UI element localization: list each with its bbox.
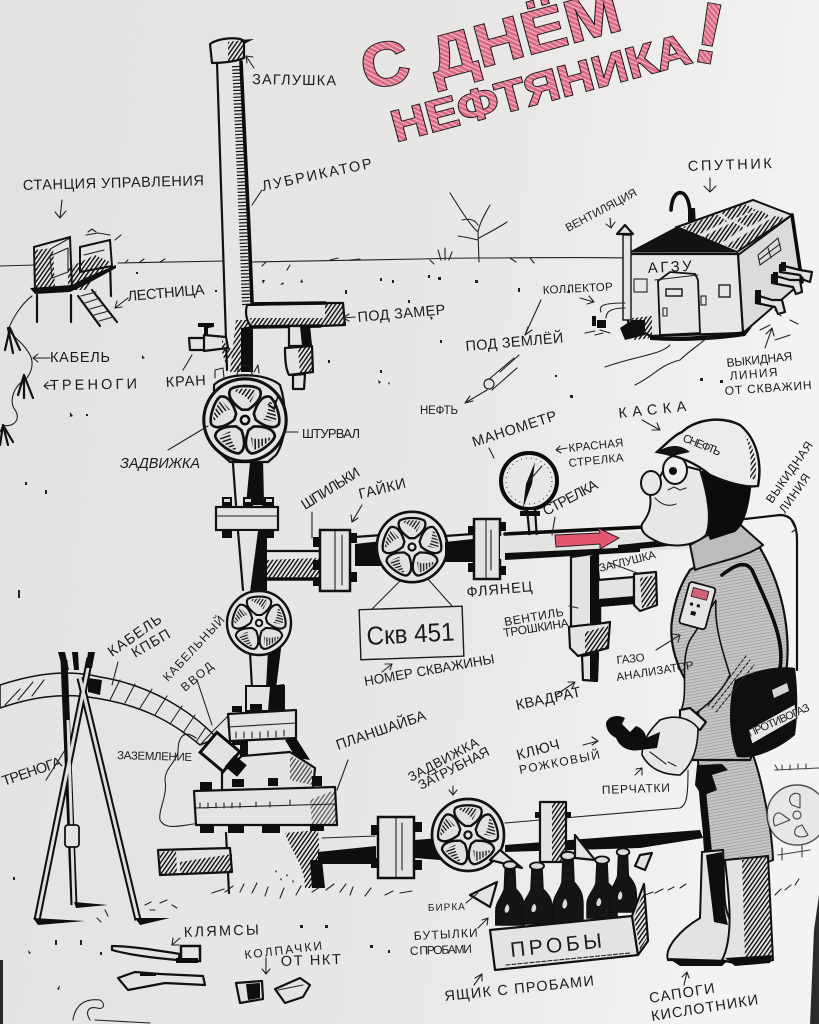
left boot [722, 856, 773, 964]
title: С: С [355, 26, 416, 104]
label: треноги: ТРЕНОГИ [50, 376, 137, 394]
lower flange and annulus line [371, 817, 440, 878]
legs [698, 755, 773, 866]
well number plate [359, 578, 464, 660]
crate label: ПРОБЫ [509, 929, 603, 962]
lower flange [228, 710, 296, 741]
neck [240, 738, 310, 760]
AGZU building [595, 200, 812, 385]
right boot [667, 850, 733, 962]
roof gable [630, 227, 737, 252]
icon: tap [189, 323, 234, 365]
lower stem [246, 462, 262, 505]
door [658, 272, 700, 335]
grounding wire [160, 734, 196, 826]
left side outlet [158, 848, 232, 875]
label: спутник: СПУТНИК [688, 156, 773, 175]
icon: top plug [210, 38, 244, 63]
label: бутылки с пробами: БУТЫЛКИ [413, 926, 478, 943]
label: колпачки от нкт [244, 939, 341, 970]
cable [0, 673, 217, 745]
label: кабельный ввод: ВВОД [178, 659, 216, 694]
T-junction: metering branch [246, 303, 345, 389]
well column below plate [158, 830, 376, 893]
ladder [78, 290, 117, 326]
base shading [650, 327, 752, 341]
nose [641, 471, 661, 495]
label: под замер: ПОД ЗАМЕР [357, 302, 446, 326]
label: противогаз: ПРОТИВОГАЗ [746, 702, 812, 740]
label: колпачки от нкт: ОТ НКТ [281, 952, 341, 970]
wrench [606, 716, 660, 750]
arm [682, 600, 730, 718]
label: нефть: НЕФТЬ [420, 405, 458, 417]
hard hat [657, 420, 759, 486]
cable entry [200, 716, 251, 781]
label: номер скважины: НОМЕР СКВАЖИНЫ [363, 651, 496, 689]
well number plate: Скв 451 [366, 616, 455, 651]
side wall [738, 215, 802, 333]
label: кран: КРАН [165, 373, 206, 391]
label: вентиляция: ВЕНТИЛЯЦИЯ [564, 187, 639, 235]
pipe hatching ticks [236, 66, 246, 305]
cabinet [34, 237, 72, 290]
label: бутылки с пробами: С ПРОБАМИ [410, 942, 472, 958]
wheel [204, 379, 286, 461]
plug below the branch [289, 326, 311, 346]
label: выкидная линия от скважин: ЛИНИЯ [729, 365, 778, 383]
label: квадрат: КВАДРАТ [515, 685, 583, 714]
feet [33, 902, 170, 925]
legs [37, 262, 111, 322]
label: под землёй: ПОД ЗЕМЛЁЙ [465, 329, 564, 355]
label: манометр: МАНОМЕТР [470, 408, 559, 451]
cuff [680, 708, 706, 730]
label: заземление: ЗАЗЕМЛЕНИЕ [117, 750, 193, 764]
valve housing [211, 375, 285, 462]
label: задвижка: ЗАДВИЖКА [120, 456, 200, 472]
label: вентиль трошкина: ТРОШКИНА [502, 616, 570, 640]
label: выкидная линия от скважин: ВЫКИДНАЯ [726, 349, 793, 370]
lower master valve wheel [227, 591, 291, 688]
label: сапоги кислотники: САПОГИ [648, 981, 716, 1007]
grass at well base [97, 870, 799, 922]
label: заглушка: ЗАГЛУШКА [252, 72, 337, 89]
right side outlet [322, 836, 375, 838]
bottom hook sketch [73, 1000, 150, 1023]
page edge shadow [0, 895, 819, 1024]
label: лубрикатор: ЛУБРИКАТОР [261, 156, 373, 195]
hair [695, 470, 752, 540]
label: газоанализатор: ГАЗО [616, 652, 645, 667]
label: коллектор: КОЛЛЕКТОР [543, 281, 613, 297]
label: кабельный ввод: КАБЕЛЬНЫЙ [159, 612, 227, 684]
lubricator pipe [210, 38, 254, 372]
third flange [468, 519, 506, 579]
manometer [501, 453, 557, 540]
legs [37, 658, 138, 920]
hat logo: СНЕФТЬ [681, 433, 722, 459]
platform and steps [30, 265, 116, 294]
label: ящик с пробами: ЯЩИК С ПРОБАМИ [444, 973, 595, 1005]
tag strings [470, 835, 652, 907]
Troshkin valve [569, 553, 657, 681]
label: шпильки: ШПИЛЬКИ [299, 465, 363, 513]
body [222, 752, 315, 790]
eye [663, 456, 687, 484]
gas mask bag [730, 667, 797, 757]
label: станция управления: СТАНЦИЯ УПРАВЛЕНИЯ [23, 173, 204, 194]
valve top lugs [215, 365, 259, 378]
label: выкидная линия от скважин [724, 349, 812, 398]
face [642, 462, 709, 545]
strap [722, 565, 781, 668]
wellhead block [194, 684, 337, 833]
label: выкидная линия от скважин: ОТ СКВАЖИН [724, 378, 812, 398]
title [355, 0, 732, 152]
label: ключ рожковый: КЛЮЧ [515, 737, 562, 764]
label: тренога: ТРЕНОГА [0, 754, 64, 790]
label: вентиль трошкина: ВЕНТИЛЬ [503, 605, 565, 629]
collar [690, 520, 763, 570]
label: каска: КАСКА [618, 399, 687, 422]
red arrow [555, 528, 619, 549]
worker [641, 420, 797, 966]
building label: АГЗУ [647, 258, 693, 277]
label: клямсы: КЛЯМСЫ [184, 922, 259, 941]
label: красная стрелка [568, 437, 624, 470]
label: бутылки с пробами [410, 926, 478, 958]
sample bottles [470, 835, 652, 925]
label: кабель кпбп: КАБЕЛЬ [105, 612, 165, 660]
label: перчатки: ПЕРЧАТКИ [602, 781, 670, 797]
control station [30, 229, 121, 326]
label: заглушка on branch: ЗАГЛУШКА [598, 549, 657, 575]
side plug [634, 572, 657, 611]
clamps [112, 946, 205, 990]
gas analyzer [679, 581, 716, 630]
vertical pipe section [238, 531, 320, 592]
label: выкидная линия, vertical: ЛИНИЯ [776, 471, 813, 516]
label: сапоги кислотники: КИСЛОТНИКИ [650, 992, 759, 1024]
label: кабель: КАБЕЛЬ [50, 350, 110, 366]
label: газоанализатор: АНАЛИЗАТОР [616, 660, 695, 684]
roof slope [677, 200, 792, 252]
valve block [569, 622, 610, 656]
label: стрелка: СТРЕЛКА [540, 477, 601, 520]
ground path [605, 335, 710, 385]
label: фланец: ФЛЯНЕЦ [466, 579, 533, 601]
tree [438, 193, 507, 262]
label: лестница: ЛЕСТНИЦА [127, 282, 205, 305]
upper flange [216, 497, 278, 538]
side branch [598, 577, 634, 606]
title: НЕФТЯНИКА: НЕФТЯНИКА [386, 25, 696, 152]
ground horizon [0, 258, 723, 990]
collector [585, 303, 652, 340]
label: штурвал: ШТУРВАЛ [302, 426, 360, 441]
tripod with cable [0, 652, 217, 925]
outlet pipes [756, 265, 812, 314]
coverall torso [671, 547, 788, 760]
annulus valve wheel [432, 799, 504, 871]
label: ключ рожковый: РОЖКОВЫЙ [518, 747, 601, 777]
sample crate [490, 884, 648, 970]
label: планшайба: ПЛАНШАЙБА [333, 706, 428, 754]
pipe body [217, 62, 251, 370]
generator [80, 240, 112, 272]
label: вентиль трошкина [502, 605, 570, 640]
label: выкидная линия, vertical: ВЫКИДНАЯ [763, 439, 816, 506]
label: задвижка затрубная: ЗАТРУБНАЯ [416, 744, 492, 793]
label: кабель кпбп: КПБП [129, 627, 173, 661]
label: бирка: БИРКА [428, 902, 465, 914]
hose behind worker [745, 515, 797, 670]
glove [642, 717, 698, 775]
second well sketch at right edge [767, 764, 819, 860]
gooseneck vent on AGZU [671, 193, 696, 228]
horizontal pipe to worker [500, 527, 700, 560]
label: колпачки от нкт: КОЛПАЧКИ [244, 939, 323, 962]
front wall [628, 254, 743, 336]
label: гайки: ГАЙКИ [357, 474, 408, 503]
ventilation pipe [617, 225, 633, 320]
pliers at belt [695, 764, 728, 796]
cable chain with tripods [0, 296, 33, 445]
caps from tubing [236, 978, 310, 1003]
annulus pipe to worker [505, 770, 703, 862]
second flange [313, 530, 357, 591]
label: задвижка затрубная: ЗАДВИЖКА [405, 735, 481, 785]
pipe and wing valve [355, 512, 473, 582]
label: красная стрелка: СТРЕЛКА [568, 452, 624, 470]
underground pipe with oil [484, 358, 517, 390]
bag strap zigzag [708, 656, 754, 712]
tubing head plate [194, 787, 337, 825]
label: красная стрелка: КРАСНАЯ [568, 437, 624, 455]
main gate valve [204, 365, 286, 505]
